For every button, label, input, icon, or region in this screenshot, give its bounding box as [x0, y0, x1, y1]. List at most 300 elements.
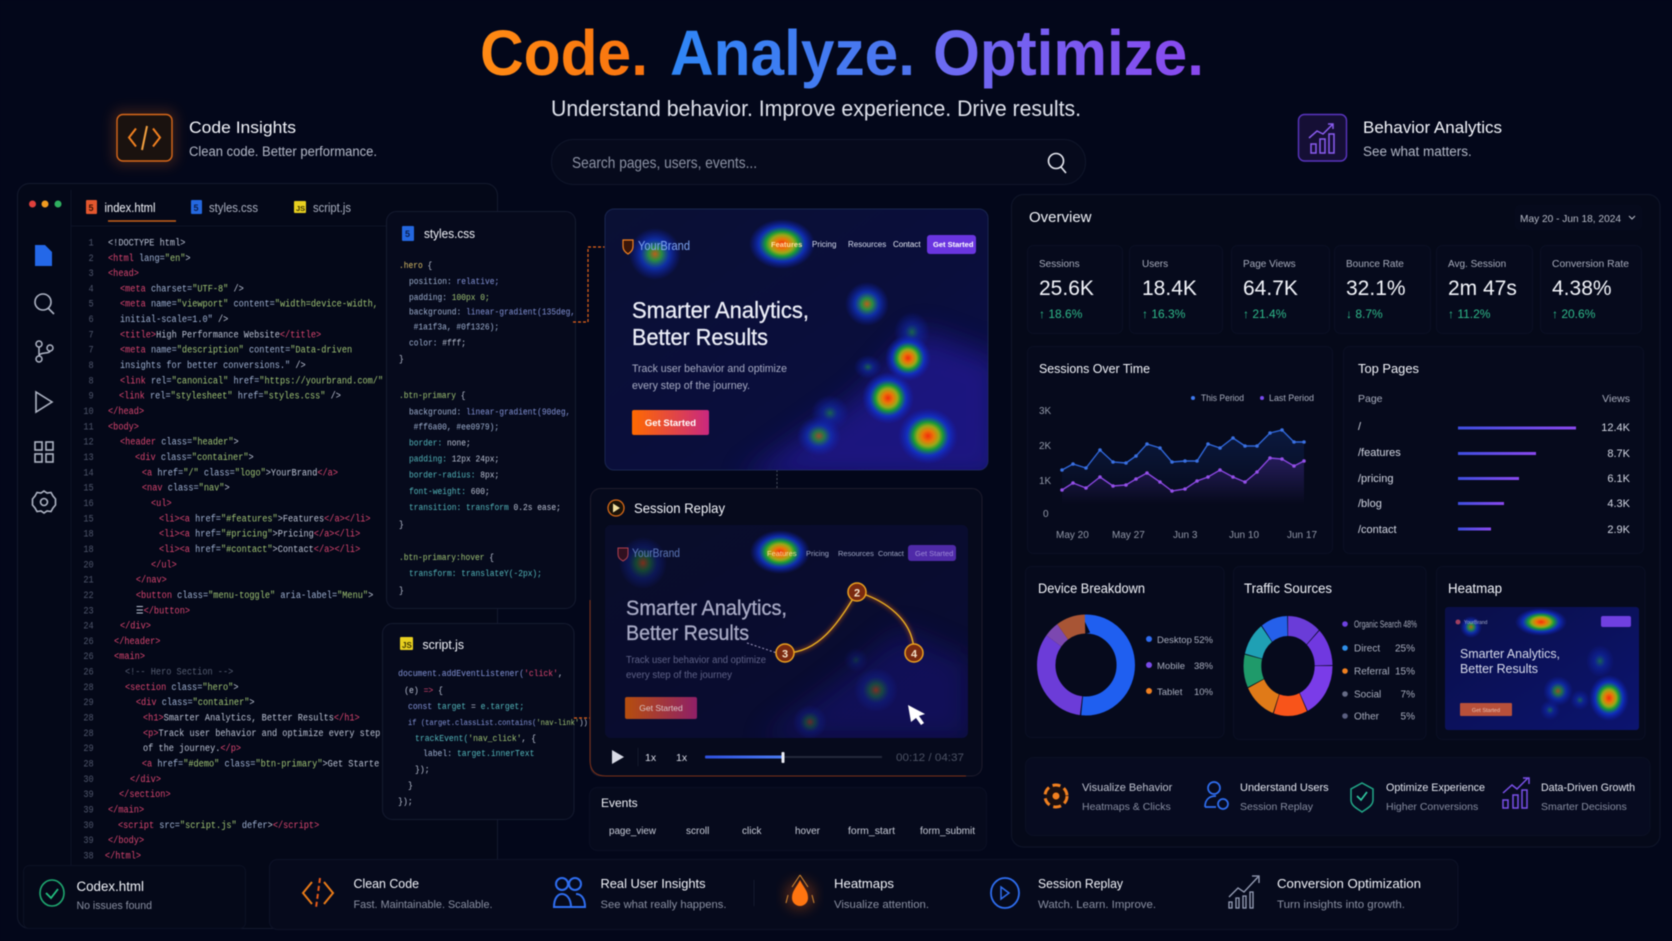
code listing: index.html: <meta charset="UTF-8" /> — [120, 283, 244, 295]
code listing: index.html: 26 — [83, 651, 94, 662]
callout: behavior analytics — [1298, 114, 1502, 161]
value: optimize experience: Higher Conversions — [1386, 801, 1478, 813]
card: file status: Codex.html — [76, 879, 144, 894]
code listing: index.html: 23 — [83, 605, 94, 616]
title: Analyze. — [670, 17, 915, 89]
editor tabs — [86, 200, 351, 221]
code listing: index.html: <link rel="stylesheet" href="styles.css" /> — [119, 390, 341, 402]
stats row: ↑ 18.6% — [1039, 307, 1083, 321]
card: device breakdown: Device Breakdown — [1038, 581, 1145, 596]
stats row: ↑ 11.2% — [1448, 307, 1491, 321]
replay screen: every step of the journey — [626, 670, 732, 681]
feature: heatmaps — [785, 875, 929, 911]
callout: behavior analytics: See what matters. — [1363, 144, 1472, 159]
code listing: script.js: (e) => { — [404, 685, 443, 696]
code listing: index.html: 22 — [83, 589, 94, 601]
code listing: index.html: 8 — [89, 375, 94, 387]
title: Code. — [480, 17, 648, 89]
player controls — [612, 748, 964, 766]
value: data-driven growth — [1503, 778, 1635, 813]
replay screen: Resources — [838, 549, 874, 558]
panel: website heatmap preview: YourBrand — [638, 239, 690, 253]
code listing: index.html: 15 — [83, 482, 94, 494]
code listing: index.html: 24 — [83, 620, 94, 632]
stats row: Page Views — [1243, 259, 1296, 270]
feature: conversion optimization: Conversion Optimization — [1277, 876, 1421, 891]
card: device breakdown — [1026, 566, 1224, 738]
card: heatmap — [1444, 582, 1640, 731]
date range picker — [1515, 205, 1642, 230]
code listing: index.html: 26 — [83, 666, 94, 678]
code listing: index.html: 8 — [89, 359, 94, 371]
window controls — [29, 200, 62, 208]
legend: devices: 10% — [1194, 687, 1214, 698]
user path with numbered steps: 2 — [854, 588, 860, 600]
card: top pages: 6.1K — [1607, 473, 1631, 485]
replay screen: Get Started — [915, 549, 953, 558]
card: top pages: 4.3K — [1607, 498, 1631, 510]
card: top pages: Page — [1358, 393, 1383, 405]
card: sessions over time: Sessions Over Time — [1039, 361, 1150, 376]
code listing: index.html: 29 — [83, 697, 94, 708]
callout: code insights: Clean code. Better performance. — [189, 144, 377, 159]
card: sessions over time: 2K — [1039, 441, 1052, 452]
card: heatmap: Heatmap — [1448, 581, 1502, 596]
stats row: 4.38% — [1552, 277, 1612, 300]
title — [480, 17, 1204, 89]
panel: styles.css — [386, 212, 576, 608]
panel: website heatmap preview: Pricing — [812, 240, 836, 249]
legend: traffic: 15% — [1395, 666, 1415, 678]
code listing: index.html: <section class="hero"> — [125, 681, 239, 693]
editor tabs: index.html — [104, 201, 156, 215]
callout: behavior analytics: Behavior Analytics — [1363, 118, 1502, 137]
donut chart: devices — [1046, 624, 1126, 706]
code listing: index.html: 6 — [89, 313, 94, 325]
replay screen: Pricing — [806, 549, 829, 558]
search bar: Search pages, users, events... — [572, 155, 757, 172]
icon: branch — [36, 341, 53, 362]
code listing: index.html: </ul> — [151, 559, 177, 570]
card: top pages: /pricing — [1358, 473, 1393, 485]
code listing: index.html: 39 — [83, 835, 94, 846]
code listing: index.html: <ul> — [151, 497, 172, 509]
donut chart: traffic — [1252, 626, 1324, 706]
code listing: index.html: 7 — [89, 329, 94, 341]
code listing: index.html: 18 — [83, 528, 94, 540]
code listing: index.html: 7 — [89, 344, 94, 356]
code listing: index.html: 30 — [83, 819, 94, 831]
user path with numbered steps: 4 — [911, 648, 918, 660]
code listing: index.html: 18 — [83, 543, 94, 555]
feature: clean code: Clean Code — [354, 876, 419, 891]
icon: search — [35, 294, 54, 314]
card: top pages: 8.7K — [1607, 448, 1631, 460]
code listing: index.html: 15 — [83, 513, 94, 525]
panel: website heatmap preview: Get Started — [933, 240, 974, 249]
date range picker: May 20 - Jun 18, 2024 — [1520, 213, 1621, 225]
heatmap thumbnail: Better Results — [1460, 661, 1538, 676]
code listing: index.html: 5 — [89, 298, 94, 310]
panel: website heatmap preview: Smarter Analytics, — [632, 297, 809, 323]
panel: events: form_start — [848, 826, 895, 837]
replay screen: Better Results — [626, 622, 749, 645]
card: top pages: 2.9K — [1607, 524, 1631, 536]
code listing: index.html: 21 — [83, 574, 94, 586]
connector: website to replay — [776, 470, 778, 488]
replay screen: Smarter Analytics, — [626, 597, 787, 620]
code listing: index.html: <li><a href="#features">Features</a></li> — [159, 513, 371, 525]
code listing: index.html: <li><a href="#pricing">Pricing</a></li> — [159, 528, 361, 540]
card: sessions over time: 1K — [1039, 476, 1052, 487]
panel: events: page_view — [609, 826, 657, 837]
card: top pages: 12.4K — [1601, 422, 1631, 434]
strip: value props — [1026, 758, 1650, 836]
panel: script.js: script.js — [422, 637, 464, 652]
panel: events — [590, 788, 986, 850]
code listing: index.html: <button class="menu-toggle" aria-label="Menu"> — [136, 589, 374, 601]
code listing: index.html: </div> — [120, 620, 151, 632]
feature: session replay — [991, 876, 1156, 911]
editor tabs: 5 — [88, 203, 94, 213]
code listing: index.html: 39 — [83, 789, 94, 800]
card: file status: No issues found — [76, 900, 152, 912]
card: sessions over time: Jun 3 — [1173, 530, 1198, 541]
code listing: index.html: 30 — [83, 773, 94, 785]
code listing: index.html: <div class="container"> — [136, 697, 255, 708]
player controls: 1x — [645, 752, 657, 764]
legend: devices: 52% — [1194, 635, 1214, 646]
card: file status — [24, 866, 246, 928]
feature: heatmaps: Heatmaps — [834, 876, 895, 891]
callout: code insights: Code Insights — [189, 118, 296, 137]
stats row: Bounce Rate — [1346, 259, 1404, 270]
code listing: index.html: insights for better conversions." /> — [120, 359, 306, 371]
panel: events: click — [742, 826, 762, 837]
replay screen — [605, 525, 970, 740]
feature: session replay: Watch. Learn. Improve. — [1038, 899, 1156, 911]
code listing: styles.css: #ff6a00, #ee0979); — [414, 422, 499, 433]
card: top pages: Views — [1602, 393, 1630, 405]
code listing: index.html: 10 — [83, 405, 94, 417]
legend: devices: Mobile — [1157, 661, 1185, 672]
code listing: index.html: <h1>Smarter Analytics, Better Results</h1> — [143, 712, 360, 724]
callout: code insights — [112, 109, 377, 166]
code listing: index.html: <li><a href="#contact">Contact</a></li> — [159, 543, 361, 555]
stats row: 18.4K — [1142, 277, 1197, 300]
card: sessions over time: Jun 10 — [1229, 530, 1259, 541]
legend: devices — [1146, 635, 1214, 698]
value: data-driven growth: Smarter Decisions — [1541, 801, 1627, 813]
code listing: script.js — [398, 668, 588, 807]
panel: styles.css: styles.css — [424, 226, 475, 241]
code listing: styles.css: transition: transform 0.2s ease; — [409, 502, 561, 513]
stats row: ↑ 16.3% — [1142, 307, 1186, 321]
panel: overview dashboard: Overview — [1029, 209, 1092, 226]
replay screen: Get Started — [639, 703, 683, 713]
code listing: index.html: 20 — [83, 559, 94, 570]
subtitle: Understand behavior. Improve experience. Drive results. — [551, 96, 1081, 121]
code listing: index.html: <main> — [114, 651, 145, 662]
card: sessions over time: May 20 — [1056, 530, 1089, 541]
card: sessions over time — [1028, 346, 1332, 554]
stats row: Sessions — [1039, 259, 1080, 270]
panel: website heatmap preview: Better Results — [632, 324, 768, 350]
panel: session replay — [590, 488, 982, 776]
code listing: index.html: <head> — [108, 268, 139, 279]
legend: devices: Desktop — [1157, 635, 1192, 646]
card: top pages: /features — [1358, 447, 1401, 459]
code listing: index.html: 26 — [83, 635, 94, 647]
icon: run — [36, 392, 52, 412]
legend: traffic: 7% — [1401, 690, 1415, 700]
value: optimize experience — [1351, 782, 1485, 813]
code listing: index.html: ☰</button> — [136, 605, 190, 616]
panel: website heatmap preview: Track user behavior and optimize — [632, 363, 787, 375]
code listing: styles.css: padding: 12px 24px; — [409, 454, 499, 465]
code listing: styles.css: } — [399, 519, 404, 530]
code listing: styles.css: } — [399, 585, 404, 596]
connector: script to session replay — [574, 717, 590, 719]
code listing: styles.css: background: linear-gradient(90deg, — [409, 407, 570, 418]
code listing: index.html: <title>High Performance Website</title> — [120, 329, 322, 341]
panel: website heatmap preview: Resources — [848, 240, 886, 249]
code listing: styles.css: color: #fff; — [409, 338, 466, 349]
user path with numbered steps: 3 — [782, 648, 788, 660]
code listing: styles.css: font-weight: 600; — [409, 486, 490, 497]
value: visualize behavior: Visualize Behavior — [1082, 782, 1173, 794]
code listing: index.html: <meta name="viewport" content="width=device-width, — [120, 298, 378, 310]
code listing: styles.css: transform: translateY(-2px); — [409, 568, 542, 579]
legend: traffic: Referral — [1354, 666, 1390, 678]
code listing: styles.css: position: relative; — [409, 276, 499, 287]
legend: traffic: 25% — [1395, 644, 1415, 654]
legend: traffic: Direct — [1354, 644, 1380, 654]
code listing: index.html: 39 — [83, 804, 94, 816]
panel: styles.css: 5 — [405, 229, 410, 239]
code listing: script.js: document.addEventListener('click', — [398, 668, 563, 679]
legend: devices: 38% — [1194, 661, 1214, 672]
heatmap thumbnail: Get Started — [1472, 708, 1500, 714]
code listing: styles.css: .btn-primary:hover { — [399, 552, 494, 563]
value: understand users: Session Replay — [1240, 801, 1314, 813]
legend: traffic: Other — [1354, 712, 1380, 722]
card: sessions over time: This Period — [1201, 393, 1244, 404]
stats row: 64.7K — [1243, 277, 1298, 300]
code listing: script.js: if (target.classList.contains('nav-link')) — [408, 720, 588, 728]
legend: traffic: Organic Search 48% — [1354, 620, 1417, 630]
legend: devices: Tablet — [1157, 687, 1183, 698]
feature: clean code — [303, 876, 492, 911]
panel: website heatmap preview: Get Started — [645, 418, 696, 429]
stats row: 32.1% — [1346, 277, 1406, 300]
code listing: styles.css — [399, 260, 575, 596]
code listing: index.html: </div> — [130, 773, 161, 785]
code listing: index.html — [83, 237, 399, 862]
code listing: index.html: 12 — [83, 436, 94, 448]
code listing: styles.css: .btn-primary { — [399, 390, 466, 401]
panel: code editor — [18, 184, 500, 928]
code listing: index.html: 28 — [83, 758, 94, 770]
code listing: script.js: const target = e.target; — [408, 701, 524, 712]
panel: events: hover — [795, 826, 821, 837]
code listing: index.html: <script src="script.js" defer></script> — [118, 819, 320, 831]
heatmap thumbnail: Smarter Analytics, — [1460, 646, 1560, 661]
value: visualize behavior: Heatmaps & Clicks — [1082, 801, 1171, 813]
code listing: styles.css: #1a1f3a, #0f1326); — [414, 322, 499, 333]
code listing: script.js: trackEvent('nav_click', { — [415, 733, 536, 744]
feature: real user insights: See what really happens. — [600, 899, 726, 911]
code listing: script.js: }); — [415, 764, 430, 775]
feature: heatmaps: Visualize attention. — [834, 899, 929, 911]
stats row: ↑ 20.6% — [1552, 307, 1596, 321]
code listing: index.html: 11 — [83, 421, 94, 433]
feature: conversion optimization: Turn insights into growth. — [1277, 899, 1405, 911]
code listing: index.html: </section> — [119, 789, 171, 800]
code listing: index.html: 29 — [83, 743, 94, 754]
icon: extensions — [35, 442, 53, 462]
code listing: index.html: <a href="/" class="logo">YourBrand</a> — [142, 467, 338, 479]
stats row: Users — [1142, 259, 1168, 270]
card: top pages: /contact — [1358, 524, 1397, 536]
code listing: index.html: 28 — [83, 712, 94, 724]
card: traffic sources: Traffic Sources — [1244, 581, 1332, 596]
code listing: index.html: 14 — [83, 467, 94, 479]
code listing: index.html: </main> — [108, 804, 145, 816]
code listing: index.html: <!DOCTYPE html> — [108, 237, 186, 249]
stats row: ↓ 8.7% — [1346, 307, 1383, 321]
code listing: script.js: }); — [398, 796, 413, 807]
code listing: index.html: </body> — [108, 835, 145, 846]
stats row: Conversion Rate — [1552, 259, 1629, 270]
code listing: styles.css: border: none; — [409, 438, 471, 449]
heatmap thumbnail: YourBrand — [1464, 620, 1488, 626]
code listing: index.html: <a href="#demo" class="btn-primary">Get Starte — [142, 758, 379, 770]
stats row — [1028, 246, 1642, 334]
card: sessions over time: Jun 17 — [1287, 530, 1317, 541]
editor tabs: script.js — [313, 201, 351, 215]
code listing: index.html: initial-scale=1.0" /> — [120, 313, 229, 325]
player controls: 00:12 / 04:37 — [896, 752, 964, 764]
value: data-driven growth: Data-Driven Growth — [1541, 782, 1635, 794]
stats row: 2m 47s — [1448, 277, 1517, 300]
search bar — [552, 140, 1086, 184]
panel: website heatmap preview: every step of the journey. — [632, 380, 750, 392]
code listing: index.html: </nav> — [136, 574, 167, 586]
code listing: index.html: <p>Track user behavior and optimize every step — [143, 727, 380, 739]
replay screen: YourBrand — [632, 548, 680, 560]
user path with numbered steps — [747, 583, 923, 662]
code listing: index.html: <div class="container"> — [135, 451, 254, 463]
card: top pages: / — [1358, 421, 1362, 433]
value: visualize behavior — [1045, 782, 1173, 813]
code listing: index.html: </header> — [114, 635, 161, 647]
code listing: index.html: <link rel="canonical" href="https://yourbrand.com/" /> — [120, 375, 399, 387]
icon: cursor — [908, 705, 925, 725]
code listing: index.html: </html> — [105, 850, 141, 862]
card: top pages — [1344, 346, 1644, 554]
replay screen: Track user behavior and optimize — [626, 655, 766, 666]
value: understand users — [1205, 782, 1329, 813]
panel: website heatmap preview: Contact — [893, 240, 921, 249]
code listing: index.html: <body> — [108, 421, 139, 433]
code listing: index.html: 3 — [89, 268, 94, 279]
panel: script.js: JS — [402, 641, 412, 650]
card: sessions over time: 3K — [1039, 406, 1052, 417]
stats row: ↑ 21.4% — [1243, 307, 1287, 321]
code listing: index.html: 38 — [83, 850, 94, 862]
line chart — [1060, 428, 1306, 505]
feature: session replay: Session Replay — [1038, 876, 1123, 891]
legend: traffic: Social — [1354, 690, 1381, 700]
player controls: 1x — [676, 752, 688, 764]
card: traffic sources — [1234, 566, 1426, 740]
heatmap thumbnail — [1445, 607, 1639, 730]
code listing: index.html: <header class="header"> — [120, 436, 239, 448]
feature: conversion optimization — [1229, 876, 1421, 911]
code listing: index.html: <!-- Hero Section --> — [125, 666, 234, 678]
code listing: index.html: <meta name="description" content="Data-driven — [120, 344, 352, 356]
code listing: index.html: </head> — [108, 405, 145, 417]
code listing: index.html: 4 — [89, 283, 94, 295]
code listing: index.html: 1 — [89, 237, 94, 249]
panel: events: Events — [601, 796, 638, 810]
panel: events: scroll — [686, 826, 709, 837]
bar: feature highlights — [270, 860, 1458, 930]
legend: traffic — [1342, 620, 1417, 722]
code listing: index.html: 9 — [89, 390, 94, 402]
card: top pages: /blog — [1358, 498, 1382, 510]
code listing: styles.css: background: linear-gradient(135deg, — [409, 307, 575, 318]
card: sessions over time: Last Period — [1269, 393, 1314, 404]
code listing: index.html: 28 — [83, 681, 94, 693]
code listing: styles.css: padding: 100px 0; — [409, 292, 490, 303]
panel: events: form_submit — [920, 826, 975, 837]
code listing: styles.css: .hero { — [399, 260, 432, 271]
code listing: script.js: } — [408, 780, 413, 791]
card: sessions over time: 0 — [1043, 509, 1049, 520]
card: top pages: Top Pages — [1358, 361, 1419, 376]
code listing: index.html: <nav class="nav"> — [142, 482, 230, 494]
icon: play badge — [608, 500, 624, 516]
code listing: index.html: 28 — [83, 727, 94, 739]
feature: clean code: Fast. Maintainable. Scalable. — [354, 899, 492, 911]
panel: script.js — [382, 624, 588, 820]
replay screen: Contact — [878, 549, 905, 558]
feature: real user insights — [554, 876, 726, 911]
editor tabs: 5 — [194, 203, 199, 213]
panel: session replay: Session Replay — [634, 500, 725, 516]
icon: settings — [32, 491, 56, 513]
panel: website heatmap preview — [605, 209, 1000, 480]
value: optimize experience: Optimize Experience — [1386, 782, 1485, 794]
panel: overview dashboard — [1012, 194, 1660, 847]
code listing: styles.css: } — [399, 354, 404, 365]
code listing: script.js: label: target.innerText — [423, 748, 534, 759]
stats row: 25.6K — [1039, 277, 1094, 300]
editor tabs: styles.css — [209, 201, 258, 215]
value: understand users: Understand Users — [1240, 782, 1329, 794]
code listing: styles.css: border-radius: 8px; — [409, 470, 499, 481]
editor tabs: JS — [296, 204, 305, 213]
replay screen: Features — [767, 549, 797, 558]
stats row: Avg. Session — [1448, 259, 1506, 270]
title: Optimize. — [933, 17, 1204, 89]
code listing: index.html: of the journey.</p> — [143, 743, 241, 754]
code listing: index.html: 16 — [83, 497, 94, 509]
code listing: index.html: <html lang="en"> — [108, 252, 191, 264]
panel: website heatmap preview: Features — [771, 240, 802, 249]
